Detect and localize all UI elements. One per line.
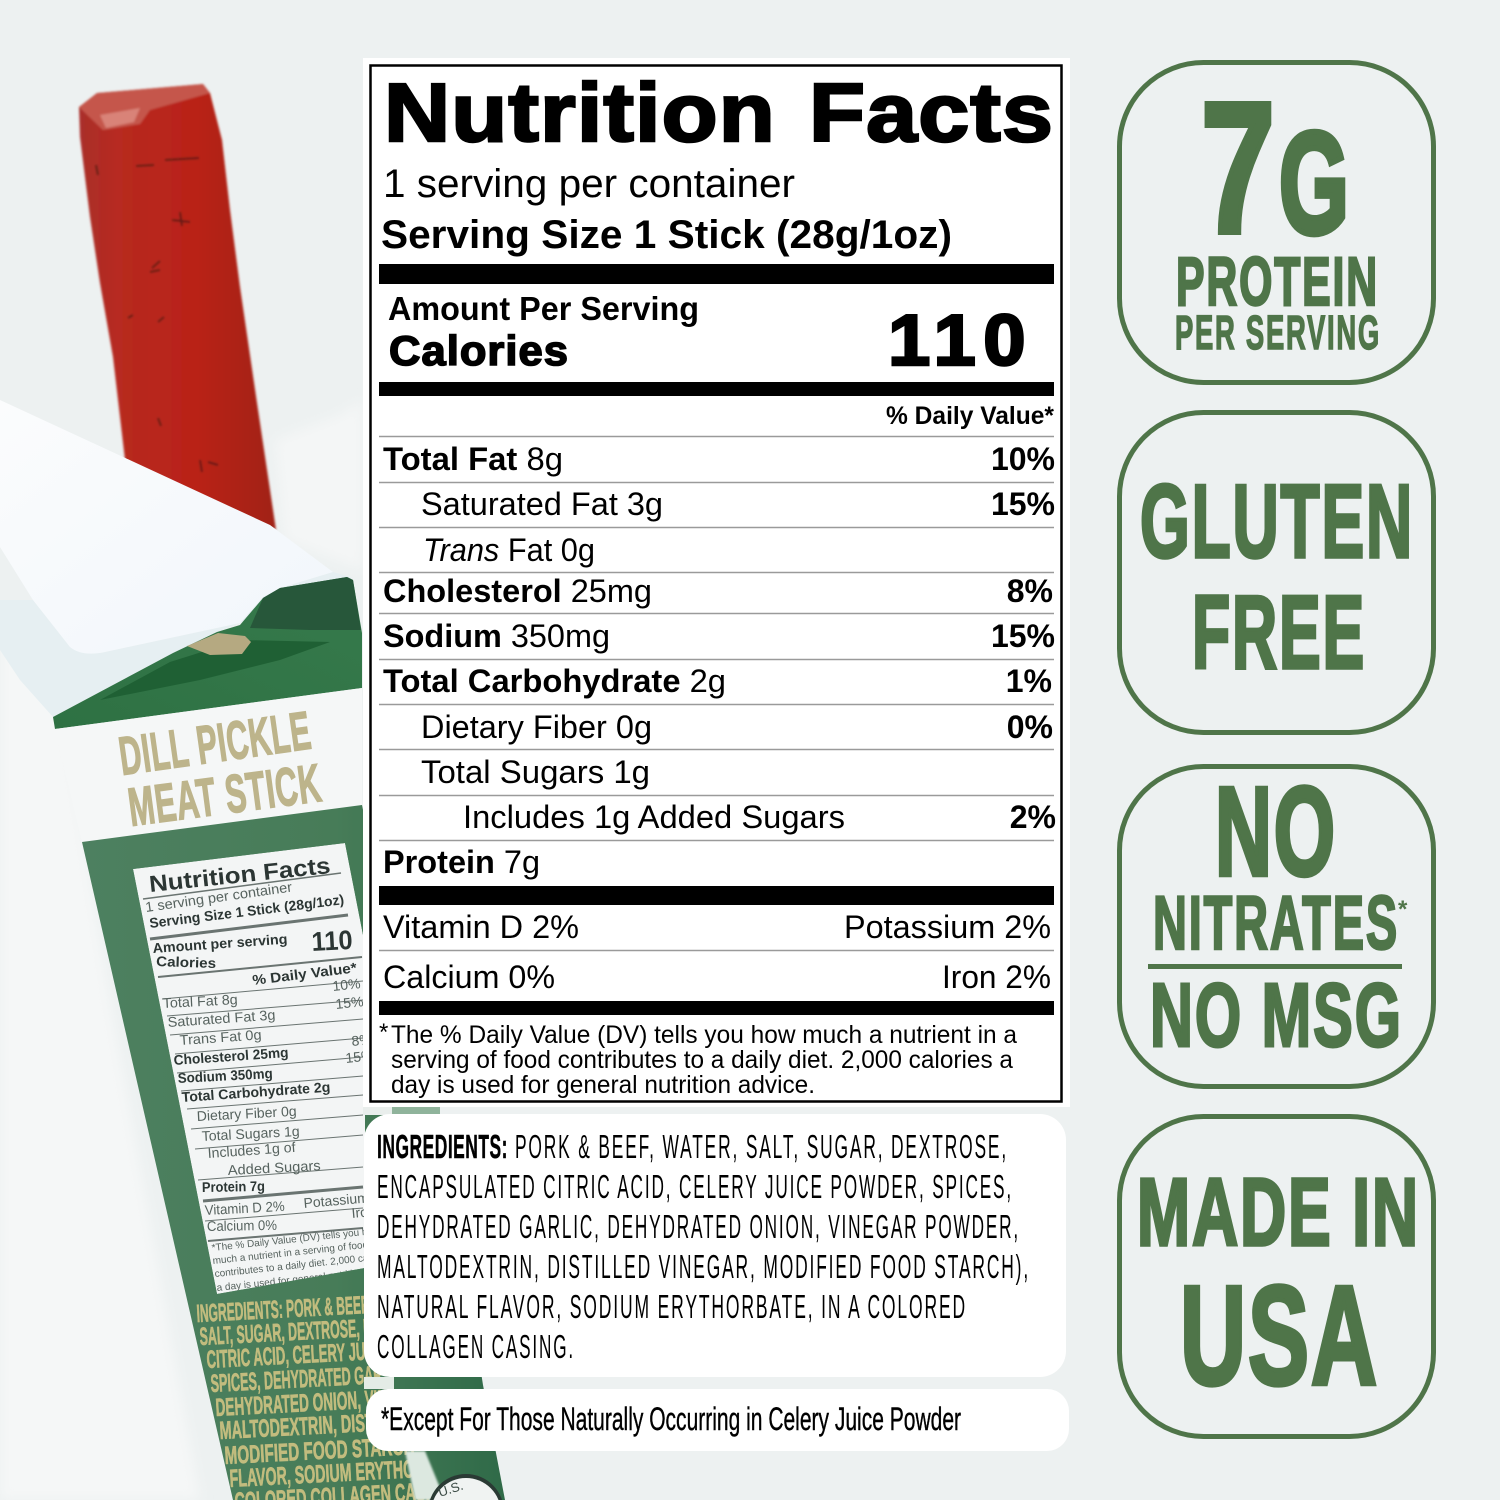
package nutrition label: Sodium 350mg	[177, 1065, 273, 1086]
package nutrition label: Total Carbohydrate 2g	[181, 1079, 331, 1105]
meat stick	[79, 84, 276, 530]
calories block: Calories	[389, 327, 569, 374]
badge: no nitrates no msg: *	[1398, 896, 1410, 923]
package nutrition label	[133, 843, 381, 1294]
ingredients panel: NATURAL FLAVOR, SODIUM ERYTHORBATE, IN A COLORED	[377, 1288, 967, 1325]
footnote: serving of food contributes to a daily diet. 2,000 calories a	[391, 1046, 1013, 1074]
nutrient rows: Dietary Fiber 0g	[421, 709, 652, 745]
nutrient rows: 15%	[991, 486, 1055, 522]
package nutrition label: 110	[311, 925, 353, 957]
footnote	[379, 1019, 1017, 1099]
wrapper glare on package	[405, 1451, 445, 1500]
serving info	[381, 162, 952, 257]
package title: MEAT STICK	[125, 753, 325, 838]
package nutrition label: Potassium	[303, 1189, 369, 1211]
package ingredients text: CITRIC ACID, CELERY JUIC	[206, 1337, 379, 1374]
serving info: 1 serving per container	[383, 162, 795, 206]
nutrient rows: 15%	[991, 618, 1055, 654]
package nutrition label: Saturated Fat 3g	[167, 1006, 276, 1030]
vitamins and minerals	[379, 909, 1054, 995]
badge: made in usa: USA	[1180, 1256, 1379, 1414]
badge: made in usa	[1120, 1116, 1434, 1436]
ingredients panel: PORK & BEEF, WATER, SALT, SUGAR, DEXTROSE,	[515, 1128, 1008, 1165]
nitrates footnote panel: *Except For Those Naturally Occurring in Celery Juice Powder	[381, 1401, 961, 1437]
package ingredients text: MODIFIED FOOD STARCH	[224, 1432, 415, 1470]
package nutrition label: *The % Daily Value (DV) tells you how	[211, 1225, 381, 1254]
package nutrition label: 1 serving per container	[144, 878, 293, 915]
package ingredients text: FLAVOR, SODIUM ERYTHOR	[229, 1455, 425, 1493]
badge: gluten free	[1120, 412, 1434, 732]
package nutrition label: Calcium 0%	[207, 1217, 277, 1234]
USDA seal	[428, 1474, 504, 1500]
badge: gluten free: FREE	[1192, 575, 1366, 691]
package nutrition label: % Daily Value*	[251, 959, 358, 988]
package nutrition label: Vitamin D 2%	[204, 1198, 285, 1218]
ingredients panel: INGREDIENTS:	[377, 1128, 508, 1165]
stick cut end	[79, 84, 210, 130]
package title	[115, 701, 325, 838]
nutrient rows: Includes 1g Added Sugars	[463, 799, 845, 835]
package nutrition label: Serving Size 1 Stick (28g/1oz)	[148, 891, 345, 931]
package nutrition label: 10%	[332, 975, 361, 994]
plastic wrapper	[0, 620, 200, 1500]
calories block: 110	[888, 301, 1033, 381]
nutrient rows: Total Carbohydrate 2g	[383, 663, 726, 699]
badge: 7g protein: PROTEIN	[1176, 243, 1379, 320]
nutrient rows: Protein 7g	[383, 844, 540, 880]
wrapper shine	[275, 400, 363, 570]
panel border	[370, 66, 1062, 1102]
nutrient rows	[379, 436, 1056, 880]
ingredients panel: COLLAGEN CASING.	[377, 1328, 575, 1365]
calories block: Amount Per Serving	[388, 290, 699, 327]
nutrient rows: Total Fat 8g	[383, 441, 563, 477]
package nutrition label: 8%	[351, 1031, 372, 1049]
package nutrition label: Dietary Fiber 0g	[196, 1103, 297, 1124]
wrapper under flap	[0, 572, 353, 717]
badge: 7g protein	[1120, 62, 1434, 382]
tan camouflage spot	[187, 633, 251, 655]
nutrient rows: 10%	[991, 441, 1055, 477]
package nutrition label: Calories	[156, 953, 217, 971]
nutrient rows: Saturated Fat 3g	[421, 486, 663, 522]
foil flap	[0, 400, 333, 654]
package nutrition label: a day is used for general nutrition	[216, 1268, 364, 1294]
nutrition facts panel	[363, 58, 1070, 1107]
package ingredients text: DEHYDRATED ONION, VIN	[215, 1385, 388, 1422]
package ingredients text: SPICES, DEHYDRATED GAR	[210, 1361, 383, 1398]
nutrient rows: 1%	[1006, 663, 1052, 699]
package nutrition label: Total Fat 8g	[162, 991, 238, 1011]
package nutrition label: Total Sugars 1g	[201, 1123, 300, 1144]
vitamins and minerals: Iron 2%	[942, 959, 1051, 995]
package title: DILL PICKLE	[115, 701, 315, 787]
package nutrition label: Added Sugars	[227, 1157, 321, 1178]
package nutrition label: Amount per serving	[152, 931, 288, 956]
package nutrition label: contributes to a daily diet. 2,000 cal	[214, 1253, 371, 1280]
package nutrition label: Cholesterol 25mg	[173, 1044, 289, 1068]
serving info: Serving Size 1 Stick (28g/1oz)	[381, 213, 952, 257]
white label area	[55, 688, 362, 843]
footnote: day is used for general nutrition advice.	[391, 1071, 815, 1099]
gap patches	[363, 1107, 392, 1115]
green package body	[82, 805, 505, 1500]
package ingredients text: INGREDIENTS: PORK & BEEF	[196, 1291, 369, 1328]
title: Nutrition Facts	[384, 66, 1054, 159]
package ingredients text: SALT, SUGAR, DEXTROSE, E	[199, 1314, 372, 1351]
package green header	[53, 577, 362, 729]
footnote: *	[379, 1019, 388, 1046]
package nutrition label: Trans Fat 0g	[179, 1026, 262, 1048]
package nutrition label: Includes 1g of	[207, 1139, 296, 1161]
package nutrition label: Iron	[351, 1203, 376, 1221]
nutrient rows: 8%	[1007, 573, 1053, 609]
footnote: The % Daily Value (DV) tells you how much a nutrient in a	[391, 1021, 1017, 1049]
daily value header: % Daily Value*	[886, 402, 1054, 430]
badge: 7g protein: 7	[1201, 65, 1275, 272]
USDA seal: U.S.	[436, 1478, 465, 1500]
vitamins and minerals: Vitamin D 2%	[383, 909, 579, 945]
nutrient rows: Total Sugars 1g	[421, 754, 650, 790]
nutrient rows: Cholesterol 25mg	[383, 573, 652, 609]
dark camouflage	[250, 577, 361, 630]
calories block	[388, 290, 1033, 381]
vitamins and minerals: Calcium 0%	[383, 959, 555, 995]
panel background	[363, 58, 1070, 1107]
package nutrition label: much a nutrient in a serving of food	[212, 1240, 369, 1267]
vitamins and minerals: Potassium 2%	[844, 909, 1051, 945]
dill specks	[96, 158, 218, 472]
nutrient rows: 0%	[1007, 709, 1053, 745]
badge: 7g protein: G	[1279, 102, 1349, 264]
badge: no nitrates no msg: NO	[1215, 761, 1337, 902]
package nutrition label: 15%	[335, 993, 364, 1012]
package nutrition label: Nutrition Facts	[148, 852, 332, 897]
package nutrition label: 15%	[345, 1047, 374, 1066]
nutrient rows: 2%	[1010, 799, 1056, 835]
package ingredients text	[196, 1291, 430, 1500]
product photo: meat stick in package	[0, 84, 505, 1500]
badge: no nitrates no msg	[1120, 761, 1434, 1086]
ingredients panel	[364, 1114, 1066, 1377]
nitrates footnote panel	[366, 1389, 1069, 1451]
nutrient rows: Sodium 350mg	[383, 618, 610, 654]
package ingredients text: MALTODEXTRIN, DISTILL	[219, 1408, 396, 1445]
nutrient rows: Trans Fat 0g	[423, 532, 595, 568]
package nutrition label: Protein 7g	[202, 1178, 265, 1195]
